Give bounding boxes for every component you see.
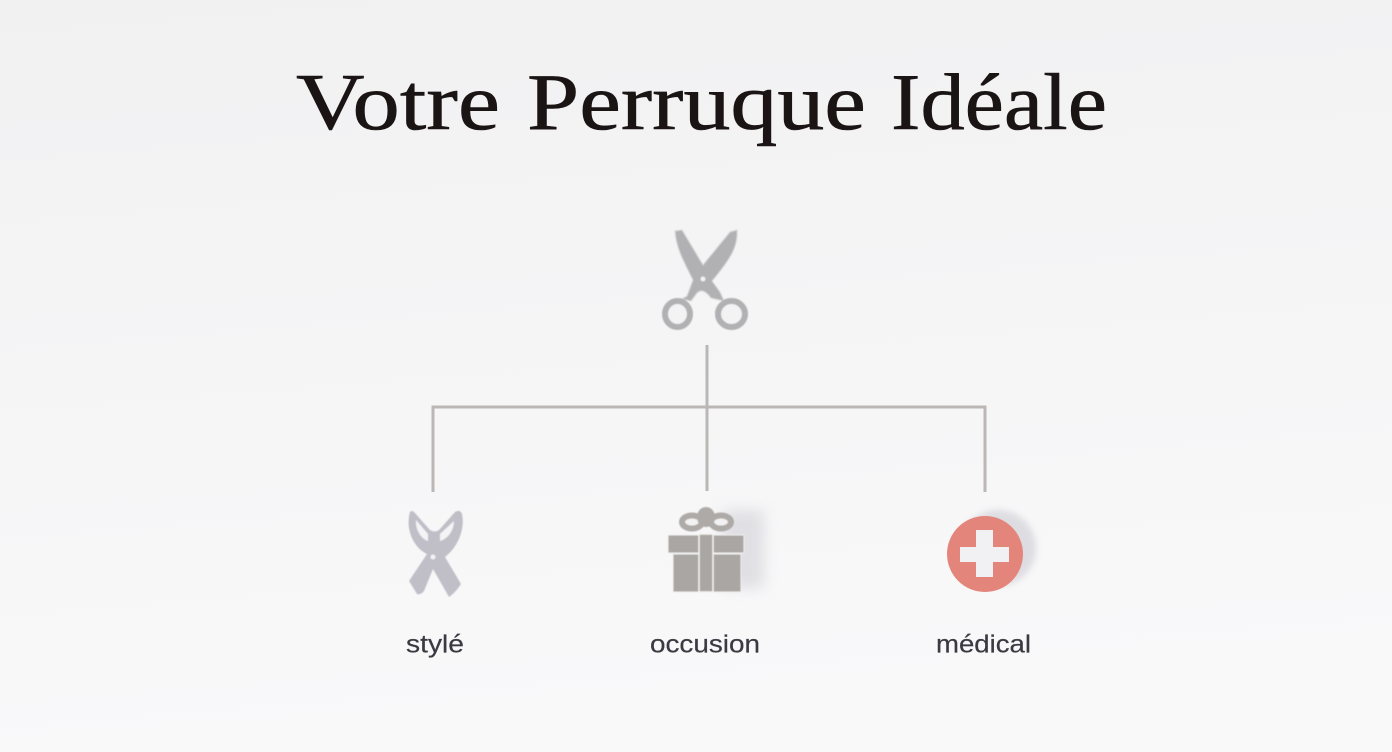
title: Idéale [891, 59, 1107, 147]
icon: top scissors [665, 230, 745, 327]
icon: medical cross badge [947, 510, 1036, 592]
icon: gift box [668, 507, 764, 592]
title: Votre [296, 59, 500, 147]
branch: stylé [406, 511, 464, 658]
connector tree [433, 345, 985, 492]
label: occusion: occusion [650, 630, 760, 658]
title: Perruque [527, 59, 866, 147]
icon: closed shears [409, 511, 463, 597]
label: stylé: stylé [406, 630, 464, 658]
label: médical: médical [936, 630, 1031, 658]
title [296, 59, 1107, 147]
branch: occusion [650, 507, 764, 658]
branch: médical [936, 510, 1036, 658]
